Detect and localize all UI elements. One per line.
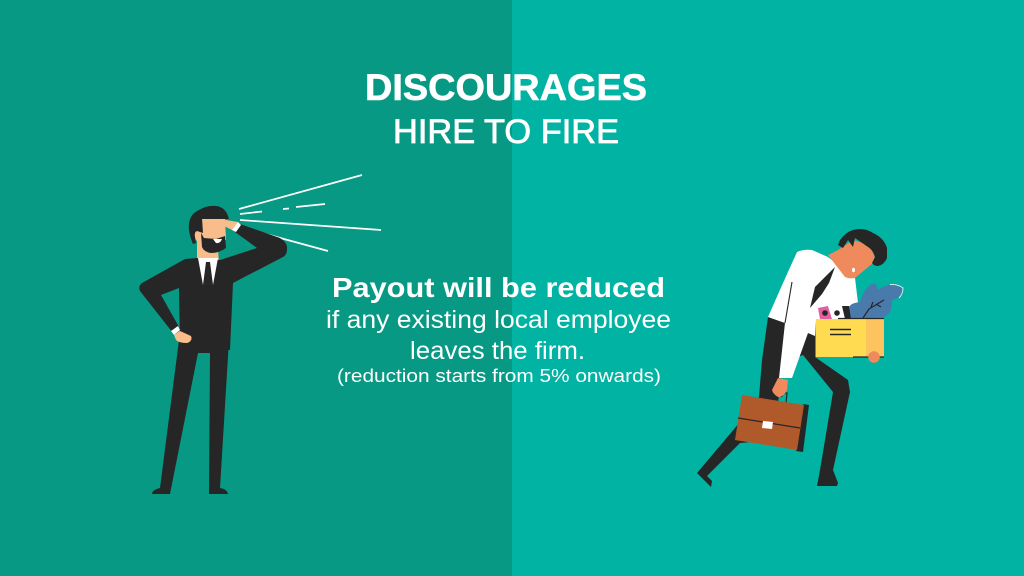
employee back leg and shoe [697, 317, 785, 487]
title: HIRE TO FIRE [393, 113, 619, 151]
boss smile [213, 239, 222, 243]
box items [818, 306, 832, 319]
panel: left background [0, 0, 512, 576]
text block: payout explanation [326, 272, 671, 386]
boss legs and shoes [152, 340, 229, 494]
boss upper cuff [232, 222, 241, 232]
illustration: boss shouting [139, 206, 287, 494]
cardboard box [816, 319, 866, 357]
employee face and neck [828, 240, 875, 278]
employee hair [838, 229, 887, 266]
employee tie [810, 267, 835, 308]
plant highlight [890, 284, 903, 298]
briefcase [796, 404, 809, 452]
text block: payout explanation: if any existing local employee [326, 306, 671, 334]
boss cuff [171, 326, 180, 335]
text block: payout explanation: leaves the firm. [410, 337, 585, 365]
icon: shout lines [239, 175, 381, 251]
boss lower hand [174, 331, 192, 343]
text block: payout explanation: (reduction starts from 5% onwards) [337, 365, 661, 386]
boss face [202, 219, 226, 240]
boss neck and ear [193, 231, 219, 262]
employee hand on box [868, 351, 880, 363]
text block: payout explanation: Payout will be reduced [332, 272, 665, 303]
employee front leg and shoe [785, 325, 850, 486]
boss shirt and tie [198, 258, 218, 285]
title [365, 67, 647, 151]
plant veins [863, 300, 884, 318]
employee shirt [768, 250, 858, 378]
employee arm line [785, 282, 792, 323]
title: DISCOURAGES [365, 67, 647, 108]
panel: right background [512, 0, 1024, 576]
boss hair [189, 206, 229, 244]
briefcase handle [781, 393, 787, 403]
boss beard [201, 233, 226, 253]
employee collar [852, 268, 855, 272]
employee hand on briefcase [772, 378, 788, 397]
illustration: employee leaving with box [697, 229, 903, 487]
boss jacket with arms [139, 224, 287, 350]
plant [849, 284, 902, 319]
boss shading hand [216, 220, 238, 230]
